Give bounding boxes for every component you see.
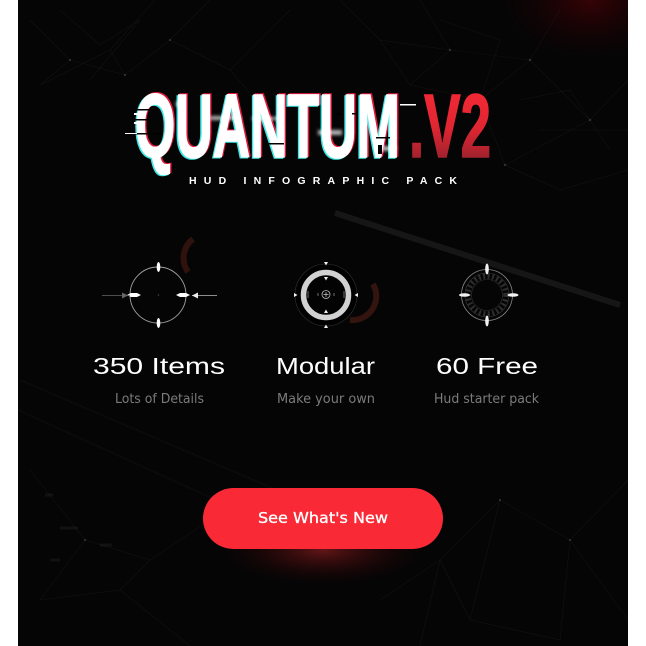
- button glow: [218, 514, 428, 586]
- title: [134, 76, 491, 178]
- title word: QUANTUM: QUANTUM: [136, 76, 401, 176]
- feature heading: 60 Free: [436, 353, 538, 379]
- feature: 60 Free: [434, 353, 539, 407]
- feature heading: Modular: [276, 353, 375, 379]
- feature caption: Hud starter pack: [434, 392, 539, 407]
- faded HUD backdrop: [18, 213, 620, 560]
- feature: 350 Items: [93, 353, 225, 407]
- title word: QUANTUM: QUANTUM: [135, 77, 400, 177]
- feature: Modular: [276, 353, 375, 407]
- feature caption: Make your own: [277, 392, 375, 407]
- title word: QUANTUM: [134, 76, 401, 178]
- button label: See What's New: [258, 509, 388, 527]
- subtitle: HUD INFOGRAPHIC PACK: [189, 175, 457, 187]
- icon: segmented dial: [459, 264, 518, 326]
- icon: modular ring: [294, 262, 358, 328]
- feature heading: 350 Items: [93, 353, 225, 379]
- glitch streaks: [125, 101, 416, 154]
- icon: crosshair with arrows: [102, 262, 217, 328]
- title word: QUANTUM: QUANTUM: [134, 78, 399, 178]
- title word: .V2: .V2: [409, 77, 491, 177]
- feature caption: Lots of Details: [115, 392, 204, 407]
- network nodes: [69, 39, 591, 541]
- button: [203, 488, 443, 549]
